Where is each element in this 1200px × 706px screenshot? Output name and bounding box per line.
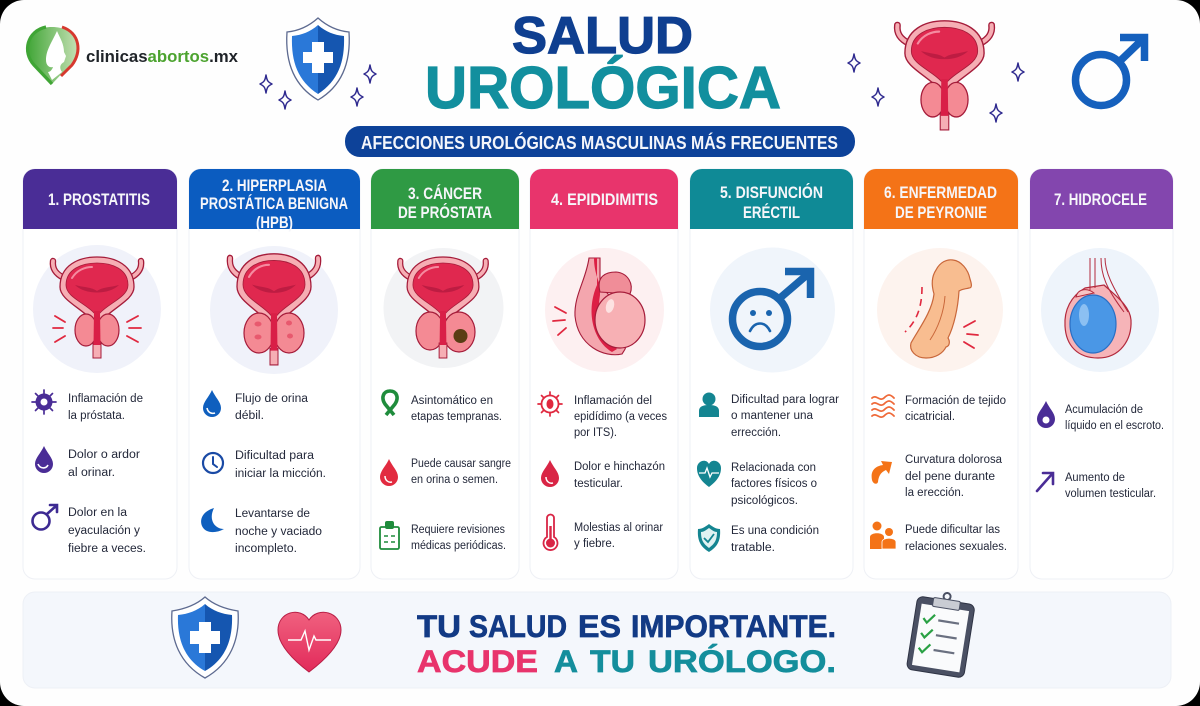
header bbox=[530, 169, 678, 229]
symptom: hinchazón: testicular. bbox=[574, 478, 623, 490]
header: DE PRÓSTATA bbox=[398, 203, 492, 222]
call to action text: ES bbox=[578, 608, 621, 644]
symptom: inflamación del epidídimo: Inflamación del bbox=[574, 395, 652, 407]
panel: 1 prostatitis bbox=[23, 169, 177, 579]
header: 5. DISFUNCIÓN bbox=[720, 183, 823, 202]
symptom: factores físicos: psicológicos. bbox=[731, 495, 798, 507]
symptom: curvatura dolorosa bbox=[872, 454, 1003, 499]
symptom: hinchazón bbox=[541, 460, 665, 490]
symptom: acumulación de líquido: líquido en el escroto. bbox=[1065, 420, 1164, 432]
symptom: revisiones médicas bbox=[380, 521, 506, 552]
header bbox=[1030, 169, 1173, 229]
symptom: sangre bbox=[380, 458, 511, 486]
header: 1. PROSTATITIS bbox=[48, 191, 150, 209]
symptom: dificultad erección: o mantener una bbox=[731, 410, 814, 422]
header: PROSTÁTICA BENIGNA bbox=[200, 194, 348, 213]
subtitle pill: AFECCIONES UROLÓGICAS MASCULINAS MÁS FRECUENTES bbox=[361, 132, 838, 153]
header bbox=[23, 169, 177, 229]
header bbox=[864, 169, 1018, 229]
symptom: dolor en la eyaculación: fiebre a veces. bbox=[68, 543, 146, 555]
call to action text: TU bbox=[417, 608, 461, 644]
symptom: curvatura dolorosa: del pene durante bbox=[905, 471, 995, 483]
symptom: inflamación del epidídimo bbox=[538, 392, 667, 439]
symptom text: tejido cicatricial: Formación de tejido bbox=[905, 395, 1006, 407]
panel: 2 hiperplasia bbox=[189, 169, 360, 579]
logo wordmark: clinicasabortos.mx bbox=[86, 47, 239, 66]
symptom: aumento de volumen: volumen testicular. bbox=[1065, 488, 1156, 500]
symptom: inflamación del epidídimo: por ITS). bbox=[574, 427, 617, 439]
symptom: dificultad erección: errección. bbox=[731, 427, 781, 439]
symptom: inflamación bbox=[32, 390, 143, 422]
symptom text: tejido cicatricial: cicatricial. bbox=[905, 411, 955, 423]
symptom: fiebre thermometer: Molestias al orinar bbox=[574, 522, 663, 534]
symptom: hinchazón: Dolor e hinchazón bbox=[574, 461, 665, 473]
header: (HPB) bbox=[256, 214, 293, 232]
symptom: aumento de volumen bbox=[1037, 472, 1156, 500]
symptom: sangre: en orina o semen. bbox=[411, 474, 498, 486]
symptom: levantarse de noche: incompleto. bbox=[235, 543, 297, 555]
symptom: fiebre thermometer: y fiebre. bbox=[574, 538, 615, 550]
symptom: flujo débil: débil. bbox=[235, 410, 264, 422]
call to action text: ACUDE bbox=[417, 643, 538, 679]
panel: 4 epididimitis bbox=[530, 169, 678, 579]
icon: male symbol bbox=[1076, 38, 1144, 106]
symptom: dificultad para iniciar bbox=[203, 450, 326, 480]
symptom: relaciones sexuales bbox=[870, 522, 1007, 553]
symptom text: relaciones sexuales bbox=[905, 524, 1007, 553]
call to action text: TU bbox=[590, 643, 635, 679]
symptom: dolor al orinar: al orinar. bbox=[68, 467, 115, 479]
header bbox=[189, 169, 360, 232]
symptom: aumento de volumen: Aumento de bbox=[1065, 472, 1125, 484]
header bbox=[371, 169, 519, 229]
symptom: inflamación: la próstata. bbox=[68, 410, 125, 422]
header: 6. ENFERMEDAD bbox=[884, 184, 997, 202]
symptom: flujo débil bbox=[203, 390, 309, 422]
header: 4. EPIDIDIMITIS bbox=[551, 191, 658, 209]
icon: bladder and prostate hero bbox=[897, 21, 992, 130]
header: ERÉCTIL bbox=[743, 203, 800, 222]
symptom: inflamación del epidídimo: epidídimo (a veces bbox=[574, 411, 667, 423]
symptom: dificultad erección bbox=[699, 392, 839, 439]
title: SALUD bbox=[512, 7, 693, 65]
symptom: condición tratable bbox=[698, 524, 819, 554]
symptom: tejido cicatricial bbox=[872, 395, 1006, 423]
symptom: fiebre thermometer bbox=[544, 514, 663, 550]
illustration: sad male symbol bbox=[710, 248, 835, 372]
symptom text: tejido cicatricial bbox=[905, 395, 1006, 423]
title: UROLÓGICA bbox=[425, 55, 781, 121]
symptom: inflamación: Inflamación de bbox=[68, 393, 143, 405]
symptom: dificultad erección: Dificultad para lograr bbox=[731, 394, 839, 406]
header bbox=[690, 169, 853, 229]
call to action text: A bbox=[554, 643, 578, 679]
header: 3. CÁNCER bbox=[408, 184, 482, 203]
symptom: levantarse de noche: Levantarse de bbox=[235, 508, 310, 520]
symptom: flujo débil: Flujo de orina bbox=[235, 393, 309, 405]
call to action text: IMPORTANTE. bbox=[631, 608, 836, 644]
illustration: inflamed prostate bbox=[33, 245, 161, 373]
icon: banner shield bbox=[172, 597, 238, 678]
symptom: curvatura dolorosa: Curvatura dolorosa bbox=[905, 454, 1003, 466]
symptom: asintomático bbox=[383, 391, 502, 423]
icon: heart with pulse bbox=[278, 612, 341, 672]
subtitle pill bbox=[345, 126, 855, 157]
symptom: acumulación de líquido: Acumulación de bbox=[1065, 404, 1143, 416]
symptom: dolor al orinar bbox=[35, 446, 140, 479]
symptom: dolor en la eyaculación: Dolor en la bbox=[68, 507, 128, 519]
symptom: condición tratable: tratable. bbox=[731, 542, 775, 554]
panel: 5 disfunción eréctil bbox=[690, 169, 853, 579]
panel: 3 cáncer de próstata bbox=[371, 169, 519, 579]
symptom: dolor en la eyaculación: eyaculación y bbox=[68, 525, 140, 537]
call to action text: URÓLOGO. bbox=[648, 643, 836, 679]
symptom: dificultad para iniciar: Dificultad para bbox=[235, 450, 315, 462]
illustration: curved organ bbox=[877, 248, 1003, 372]
panel: 6 enfermedad de peyronie bbox=[864, 169, 1018, 579]
panel: 7 hidrocele bbox=[1030, 169, 1173, 579]
call to action text: SALUD bbox=[469, 608, 567, 644]
call to action text bbox=[417, 608, 836, 679]
symptom: levantarse de noche: noche y vaciado bbox=[235, 526, 322, 538]
symptom text: relaciones sexuales: relaciones sexuales. bbox=[905, 541, 1007, 553]
symptom: condición tratable: Es una condición bbox=[731, 525, 819, 537]
decorative sparkles right bbox=[848, 54, 1024, 122]
illustration: enlarged prostate bbox=[210, 246, 338, 374]
illustration: inflamed testicle bbox=[545, 248, 664, 372]
symptom: curvatura dolorosa: la erección. bbox=[905, 487, 964, 499]
symptom: asintomático: Asintomático en bbox=[411, 395, 493, 407]
header: 2. HIPERPLASIA bbox=[222, 177, 327, 195]
header: DE PEYRONIE bbox=[895, 204, 987, 222]
symptom: levantarse de noche bbox=[201, 508, 322, 555]
symptom: factores físicos: Relacionada con bbox=[731, 462, 816, 474]
symptom: factores físicos bbox=[697, 461, 817, 507]
symptom: asintomático: etapas tempranas. bbox=[411, 411, 502, 423]
symptom: sangre: Puede causar sangre bbox=[411, 458, 511, 470]
illustration: prostate with tumor bbox=[384, 248, 504, 368]
symptom: factores físicos: factores físicos o bbox=[731, 478, 817, 490]
decorative sparkles left bbox=[260, 65, 376, 109]
illustration: hydrocele bbox=[1041, 248, 1159, 372]
symptom: dolor al orinar: Dolor o ardor bbox=[68, 449, 140, 461]
icon: clipboard checklist bbox=[906, 588, 976, 678]
symptom: revisiones médicas: Requiere revisiones bbox=[411, 524, 505, 536]
panel: bottom banner bbox=[23, 588, 1171, 688]
header: 7. HIDROCELE bbox=[1054, 191, 1147, 209]
symptom: revisiones médicas: médicas periódicas. bbox=[411, 540, 506, 552]
logo: clinicasabortos.mx bbox=[27, 27, 239, 84]
symptom: acumulación de líquido bbox=[1037, 401, 1164, 432]
title bbox=[425, 7, 781, 121]
icon: top shield with cross bbox=[287, 18, 349, 100]
symptom: dolor en la eyaculación bbox=[32, 505, 146, 555]
symptom text: relaciones sexuales: Puede dificultar las bbox=[905, 524, 1000, 536]
symptom: dificultad para iniciar: iniciar la micción. bbox=[235, 468, 326, 480]
